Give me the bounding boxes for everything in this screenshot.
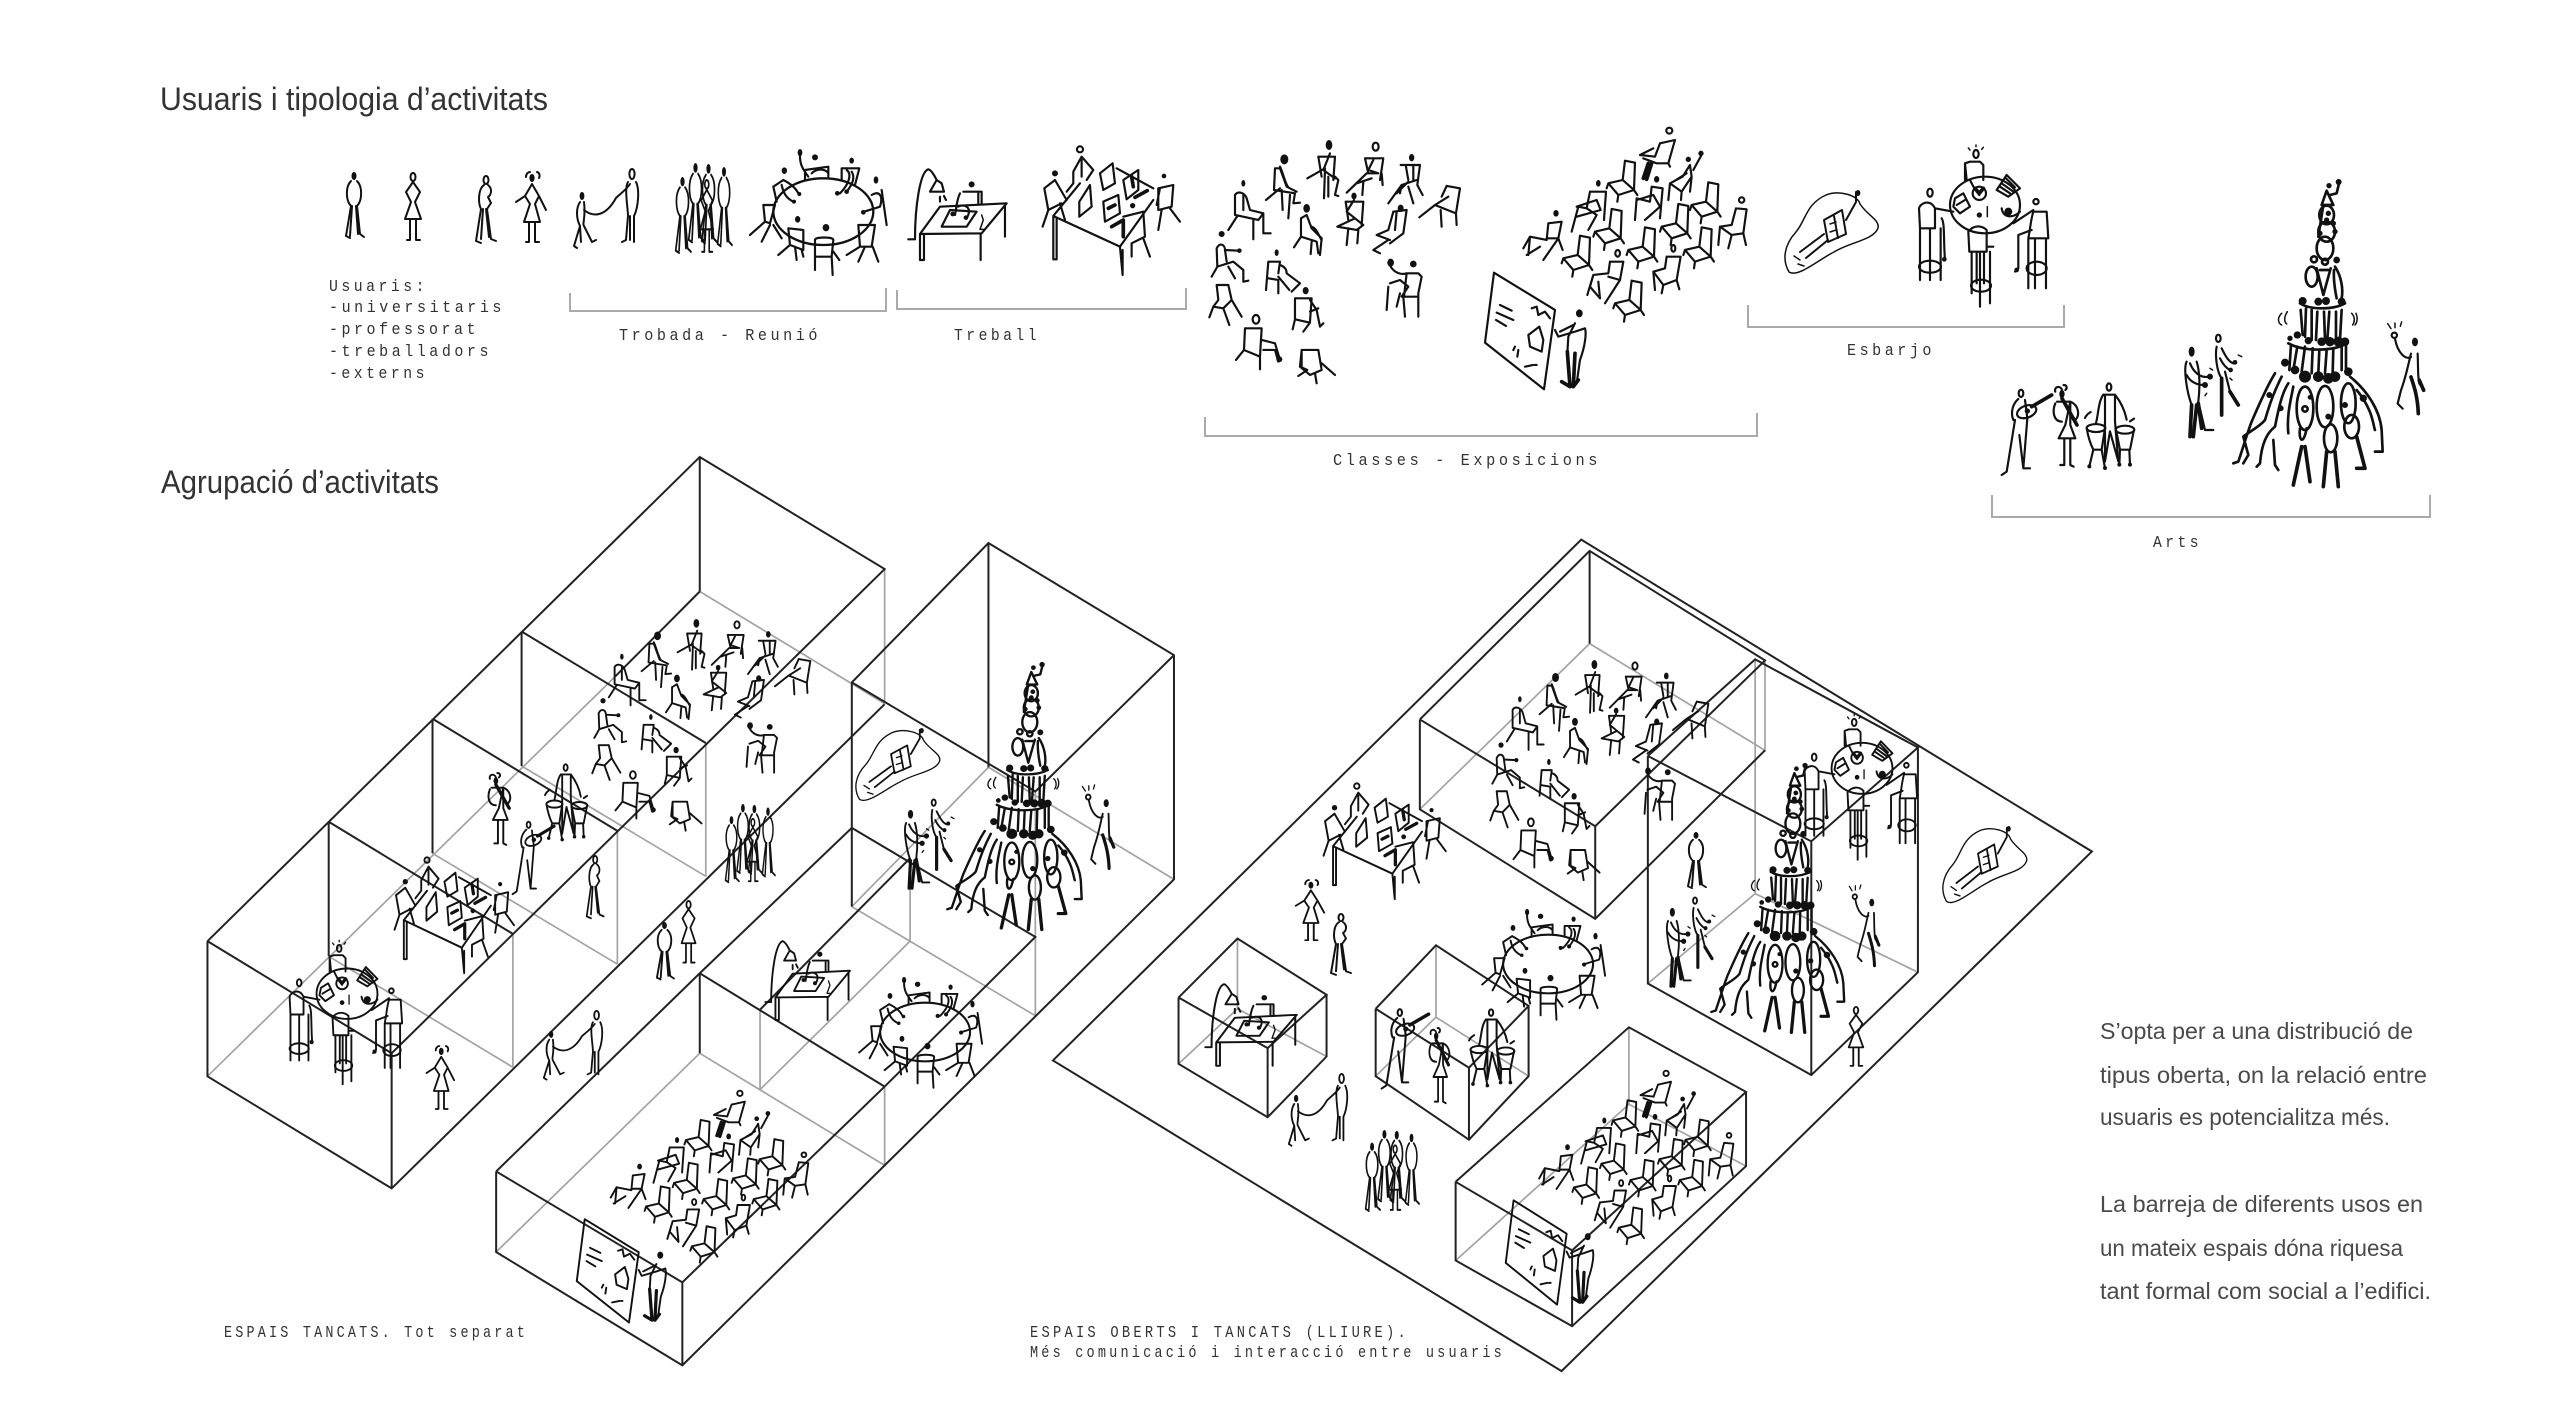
group: classes exposicions (1205, 128, 1757, 471)
caption: open spaces: ESPAIS OBERTS I TANCATS (LLIURE). (1030, 1324, 1409, 1343)
icon: two spectators (2185, 335, 2242, 437)
users list (329, 278, 505, 384)
icon: handshake (574, 169, 638, 248)
caption: open spaces: Més comunicació i interacció entre usuaris (1030, 1344, 1505, 1363)
group: arts (1992, 179, 2430, 553)
bracket (1992, 495, 2430, 517)
text block: description: S’opta per a una distribució de (2100, 1018, 2413, 1044)
icon: shared work table (1043, 146, 1180, 275)
icon: reader on rug (1785, 190, 1878, 273)
text block: description: usuaris es potencialitza més. (2100, 1104, 2390, 1130)
room: desk (765, 941, 850, 1020)
panel: closed spaces axonometric (207, 457, 1174, 1365)
icon: desk with lamp (908, 169, 1007, 260)
icon: guitarist (2002, 390, 2052, 475)
room: round table (859, 977, 982, 1088)
icon: game table with stools (1919, 145, 2048, 307)
text block: description: tant formal com social a l’edifici. (2100, 1278, 2431, 1304)
open: woman front (1849, 1007, 1863, 1066)
caption: closed spaces: ESPAIS TANCATS. Tot separat (224, 1324, 528, 1343)
wireframe: closed rooms (207, 457, 1174, 1365)
corridor: man (587, 856, 604, 918)
bracket (1205, 413, 1757, 436)
text block: description: La barreja de diferents usos en (2100, 1191, 2423, 1217)
room: seated audience (592, 619, 810, 831)
icon: drummer (2085, 383, 2134, 470)
box: class with board (1506, 1071, 1733, 1305)
room: reader (856, 728, 940, 800)
icon: woman with hair marks (516, 172, 546, 242)
icon: waving person (2388, 322, 2424, 414)
icon: saxophonist (2054, 385, 2078, 467)
open: round table (1482, 909, 1605, 1020)
room: spectators (905, 799, 954, 888)
group: treball (897, 146, 1186, 346)
corridor: handshake (544, 1011, 602, 1080)
users list: -treballadors (329, 343, 492, 362)
users list: Usuaris: (329, 278, 428, 297)
icon: group of people (676, 163, 732, 253)
label: Classes - Exposicions (1333, 452, 1601, 471)
open: reader (1943, 826, 2027, 903)
caption: open spaces (1030, 1324, 1505, 1363)
group: trobada reunio (570, 149, 887, 346)
open: group of people (1366, 1130, 1419, 1211)
corridor: group of people (725, 804, 775, 882)
bracket (1748, 305, 2064, 327)
cube: musicians (1382, 1009, 1514, 1103)
open: work table (1324, 783, 1446, 899)
users list: -externs (329, 365, 428, 384)
group: esbarjo (1748, 145, 2064, 361)
label: Arts (2153, 534, 2202, 553)
users list: -universitaris (329, 299, 505, 318)
room: man (1688, 832, 1706, 888)
room: spectators (1667, 897, 1715, 986)
corridor: woman (427, 1046, 454, 1109)
room: waving person (1849, 885, 1879, 966)
room: esbarjo (1805, 714, 1917, 860)
bracket (570, 288, 886, 311)
open: handshake (1289, 1074, 1347, 1146)
label: Esbarjo (1847, 342, 1935, 361)
icon: man (346, 172, 364, 238)
room: human tower (947, 662, 1082, 930)
panel: open spaces axonometric (1030, 540, 2092, 1371)
room: human tower (1711, 763, 1844, 1032)
label: Trobada - Reunió (619, 327, 821, 346)
text block: description: tipus oberta, on la relació entre (2100, 1062, 2427, 1088)
room: musicians (488, 764, 587, 894)
cube: desk (1205, 984, 1297, 1066)
room: waving person (1082, 785, 1114, 868)
icon: seated audience (1209, 140, 1460, 383)
icon: class with board and teacher (1485, 128, 1747, 389)
icon: man hand on hip (476, 176, 496, 243)
text block: description (2100, 1018, 2431, 1304)
bracket (897, 288, 1186, 309)
icon: human tower (2233, 179, 2383, 487)
corridor: couple (657, 901, 696, 979)
title: agrupacio: Agrupació d’activitats (161, 464, 439, 500)
room: work table (395, 857, 514, 973)
room: class with board (577, 1091, 808, 1323)
wireframe: open plan (1053, 540, 2092, 1371)
open: woman (1296, 880, 1324, 940)
text block: description: un mateix espais dóna riquesa (2100, 1235, 2403, 1261)
user icons row (346, 172, 546, 243)
title: usuaris i tipologia: Usuaris i tipologia d’activitats (160, 81, 548, 117)
users list: -professorat (329, 321, 479, 340)
label: Treball (954, 327, 1040, 346)
icon: woman (405, 173, 421, 240)
open: man (1331, 914, 1351, 975)
open: seated audience (1490, 660, 1708, 880)
icon: round meeting table (750, 149, 887, 275)
room: esbarjo (290, 940, 402, 1084)
